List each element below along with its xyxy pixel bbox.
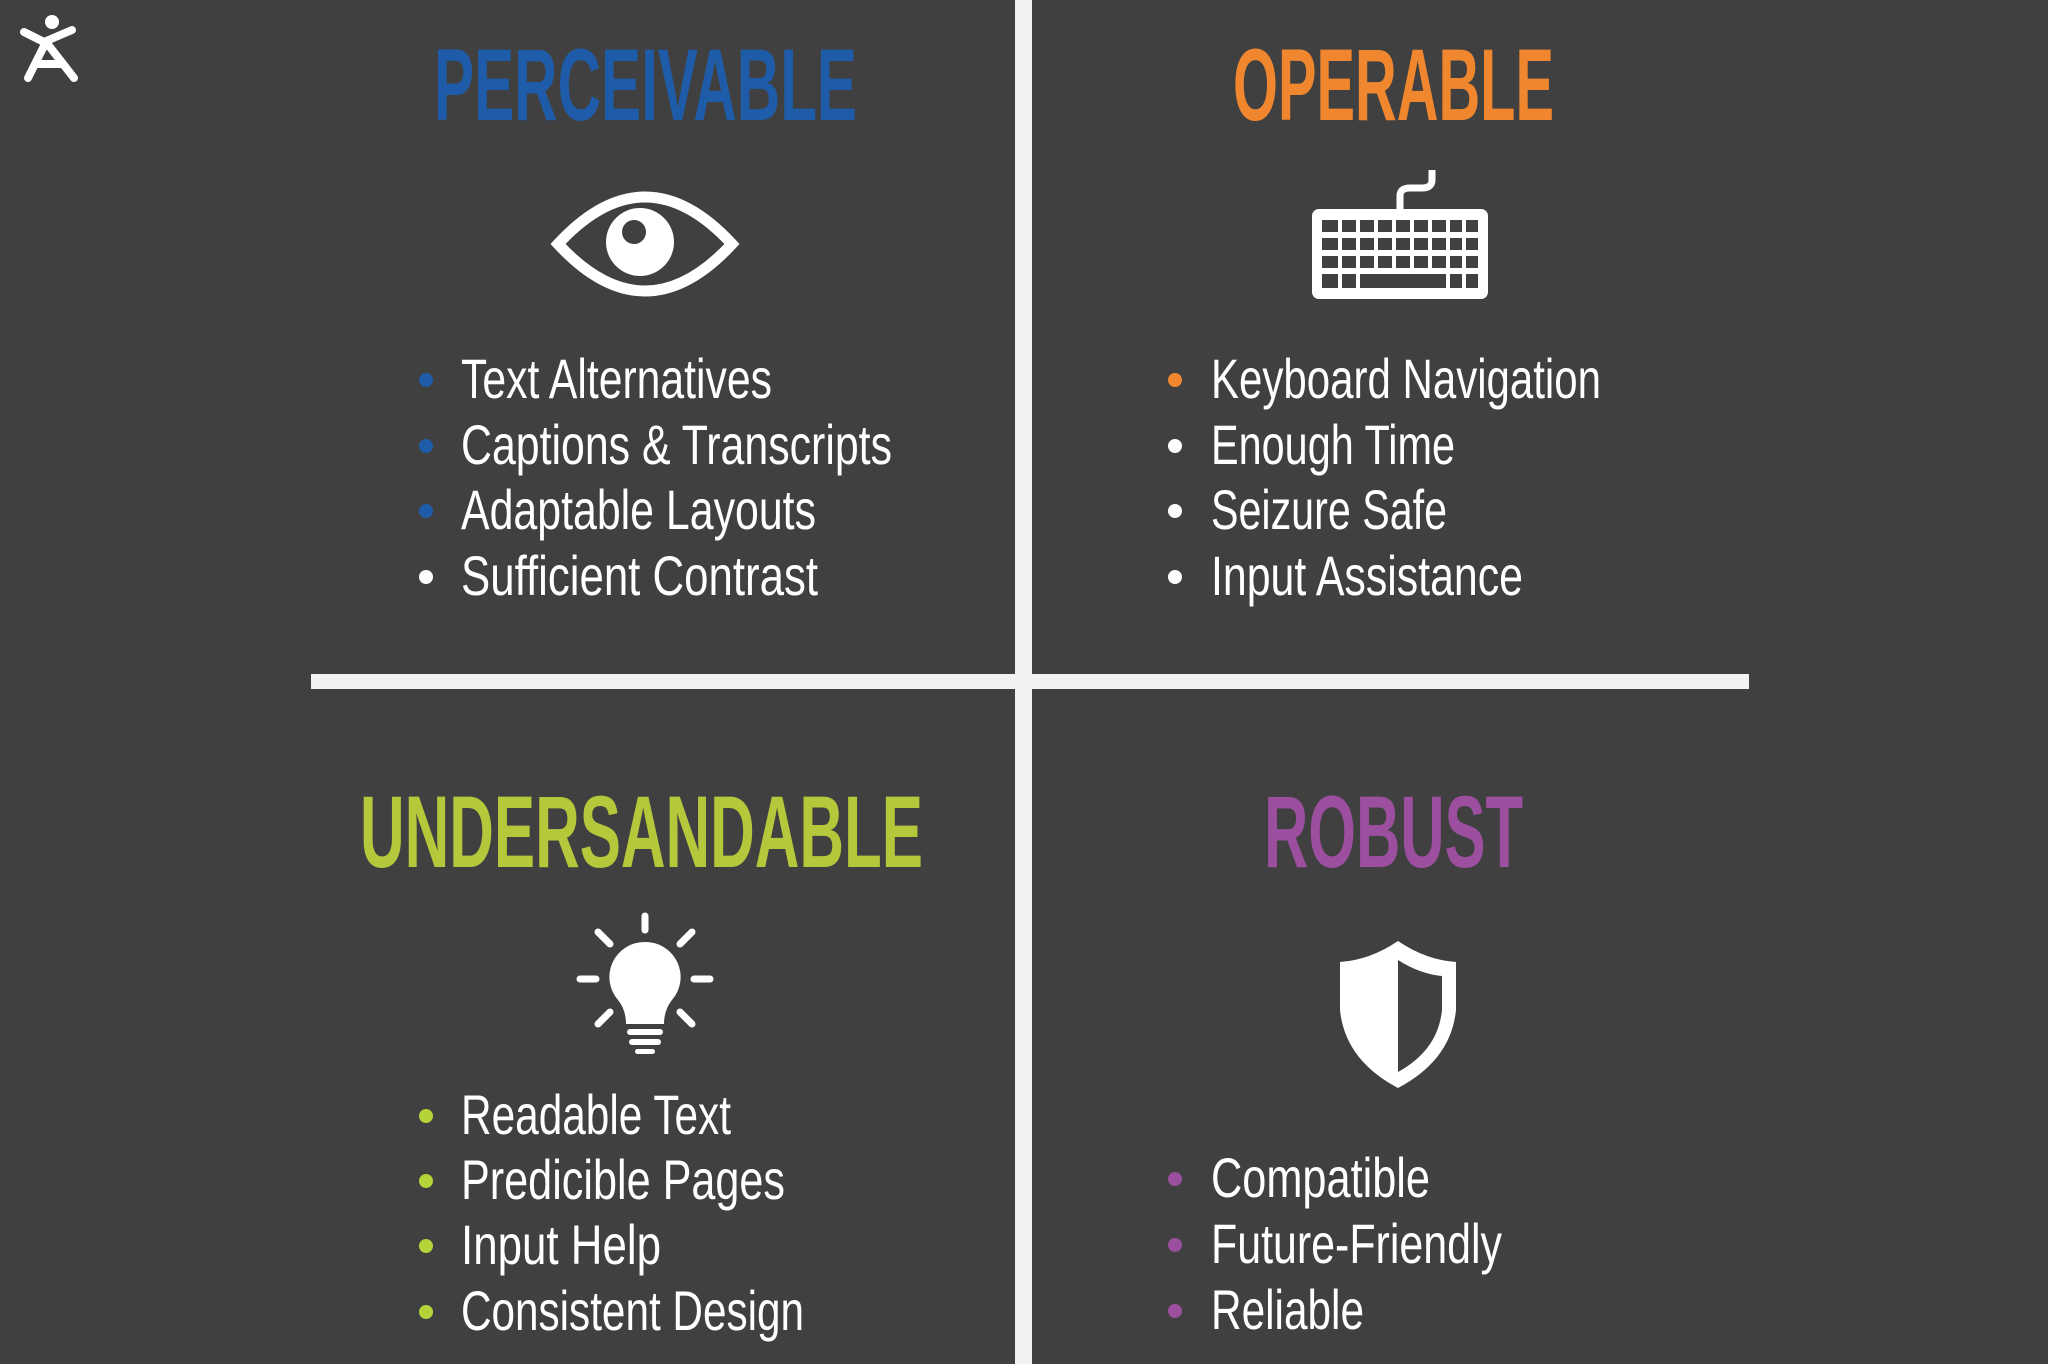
list: operable items: Enough Time — [1211, 413, 1455, 476]
list: understandable items: Predicible Pages — [461, 1148, 785, 1211]
list: operable items: Seizure Safe — [1211, 478, 1447, 541]
list: perceivable items: Text Alternatives — [461, 347, 772, 410]
list: understandable items: Readable Text — [461, 1083, 731, 1146]
list: robust items: Reliable — [1211, 1278, 1364, 1341]
title: undersandable: UNDERSANDABLE — [360, 775, 923, 889]
icon: keyboard — [1312, 170, 1488, 299]
icon: eye — [558, 197, 732, 291]
list: understandable items: Input Help — [461, 1213, 661, 1276]
list: operable items — [1168, 347, 1601, 607]
list: robust items — [1168, 1146, 1502, 1341]
title: perceivable: PERCEIVABLE — [434, 28, 857, 142]
panel: understandable — [360, 775, 923, 1342]
list: operable items: Input Assistance — [1211, 544, 1523, 607]
list: understandable items — [419, 1083, 804, 1342]
list: operable items: Keyboard Navigation — [1211, 347, 1601, 410]
panel: robust — [1168, 775, 1523, 1341]
title: operable: OPERABLE — [1233, 28, 1554, 142]
icon: accessibility logo — [24, 15, 74, 78]
list: perceivable items: Sufficient Contrast — [461, 544, 818, 607]
title: robust: ROBUST — [1264, 775, 1523, 889]
panel: perceivable — [419, 28, 892, 607]
list: perceivable items: Adaptable Layouts — [461, 478, 816, 541]
icon: lightbulb — [580, 916, 710, 1054]
list: robust items: Future-Friendly — [1211, 1212, 1502, 1275]
panel: operable — [1168, 28, 1601, 607]
icon: shield — [1340, 941, 1456, 1088]
list: perceivable items: Captions & Transcripts — [461, 413, 892, 476]
list: understandable items: Consistent Design — [461, 1279, 804, 1342]
list: perceivable items — [419, 347, 892, 607]
list: robust items: Compatible — [1211, 1146, 1430, 1209]
